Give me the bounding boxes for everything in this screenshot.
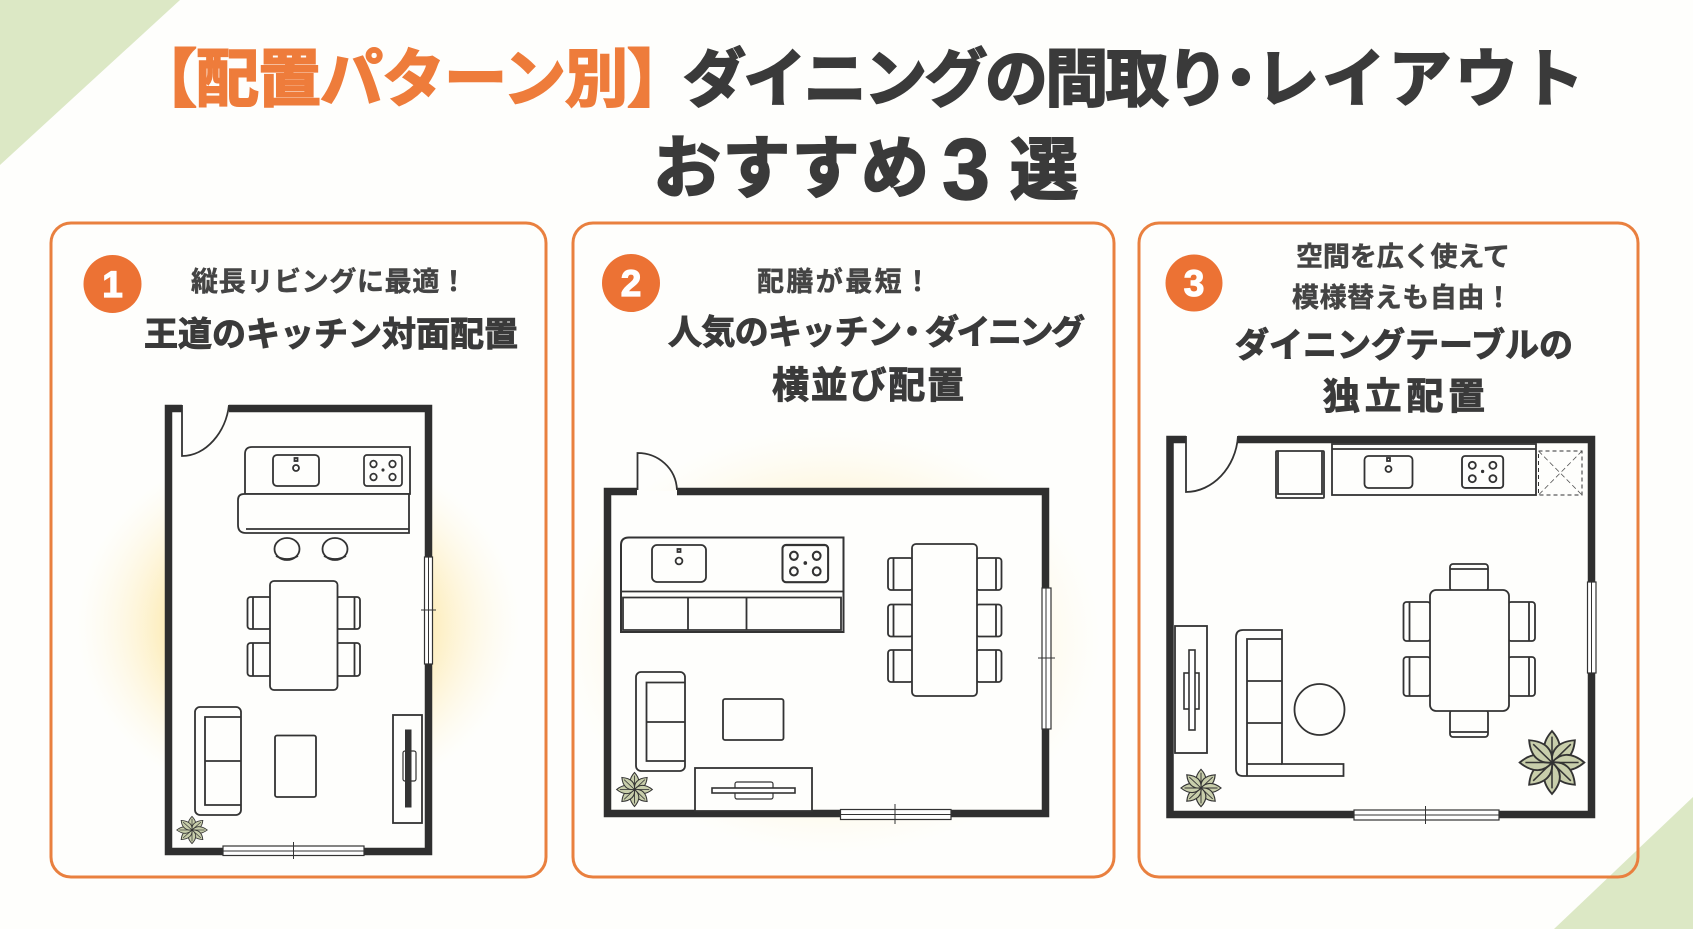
panel 3 subheading: 空間を広く使えて <box>1296 242 1510 272</box>
floor plan 1 <box>168 405 436 859</box>
panel 3 border <box>1139 223 1638 877</box>
sofa <box>636 672 685 771</box>
L-shaped sofa <box>1236 630 1344 776</box>
title: orange part: 【配置パターン別】 <box>134 45 690 115</box>
panel 2 subheading: 配膳が最短！ <box>757 266 931 297</box>
panel 1: kitchen facing layout <box>51 223 546 877</box>
dining table and chairs <box>1404 564 1535 737</box>
panel 2 heading: 人気のキッチン <box>668 314 902 352</box>
bar stools <box>274 538 348 560</box>
sofa <box>195 707 241 815</box>
kitchen unit <box>621 538 844 632</box>
plant <box>177 816 207 844</box>
walls <box>168 408 428 852</box>
title: dark part <box>683 45 1584 115</box>
door <box>638 453 677 490</box>
title: second line: 3 <box>942 122 990 218</box>
window bottom <box>840 804 951 824</box>
panel 3 subheading: 模様替えも自由！ <box>1292 283 1512 313</box>
window right <box>1588 582 1596 673</box>
floor plan 2 <box>607 453 1055 824</box>
tv stand <box>393 715 422 823</box>
badge 3: 3 <box>1184 263 1204 304</box>
floor plan 3 <box>1170 436 1596 824</box>
door <box>182 405 229 456</box>
plant <box>617 772 652 806</box>
door <box>1186 436 1238 492</box>
bottom-right green corner <box>1554 797 1693 929</box>
title: second line <box>653 122 1078 218</box>
panel 2 heading line 2: 横並び配置 <box>772 365 964 406</box>
walls <box>608 492 1046 814</box>
coffee table <box>275 736 316 797</box>
badge 3 <box>1166 254 1222 312</box>
panel 2 heading: ダイニング <box>925 313 1085 352</box>
title: second line: 選 <box>1010 133 1078 209</box>
title: dark part: ・ <box>1210 45 1272 115</box>
panel 3 subheading <box>1292 242 1512 313</box>
glow behind plan 1 <box>76 440 520 810</box>
coffee table <box>723 699 784 740</box>
kitchen unit <box>238 447 410 533</box>
fridge <box>1276 451 1324 498</box>
badge 2 <box>602 254 660 312</box>
badge 2: 2 <box>621 263 641 304</box>
dining table and chairs <box>248 581 360 690</box>
title: second line: おすすめ <box>653 131 929 207</box>
title: dark part: レイアウト <box>1256 45 1584 115</box>
panel 3 heading: 独立配置 <box>1323 376 1485 417</box>
walls <box>1170 440 1592 814</box>
title: dark part: ダイニングの間取り <box>683 45 1229 115</box>
window bottom <box>223 842 364 859</box>
tv stand <box>695 768 812 811</box>
panel 2: side-by-side layout <box>562 223 1114 877</box>
panel 1 heading: 王道のキッチン対面配置 <box>144 316 518 354</box>
window bottom <box>1354 806 1499 824</box>
kitchen unit <box>1332 444 1536 495</box>
badge 1 <box>84 255 142 313</box>
badge 1: 1 <box>102 264 123 305</box>
panel 3 heading: ダイニングテーブルの <box>1235 326 1573 365</box>
panel 2 heading <box>668 313 1085 352</box>
panel 2 heading: ・ <box>895 314 929 352</box>
title <box>134 45 1584 218</box>
window right <box>421 557 436 664</box>
panel 1 border <box>51 223 546 877</box>
panel 3 heading <box>1235 326 1573 417</box>
small plant <box>1181 769 1221 807</box>
window right <box>1038 588 1055 729</box>
round table <box>1294 684 1344 735</box>
large plant <box>1520 731 1584 794</box>
panel 3: independent layout <box>1139 223 1638 877</box>
tv stand <box>1175 626 1207 753</box>
dashed appliance <box>1538 451 1582 495</box>
dining table and chairs <box>888 544 1002 696</box>
panel 1 subheading: 縦長リビングに最適！ <box>191 266 467 297</box>
glow behind plan 2 <box>562 425 1102 855</box>
panel 2 border <box>573 223 1114 877</box>
top-left green corner <box>0 0 180 165</box>
